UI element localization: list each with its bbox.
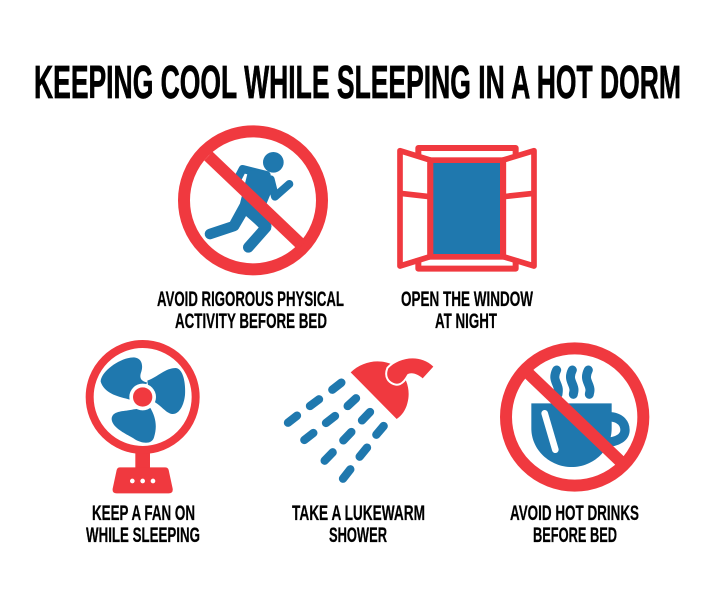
label: shower: [292, 501, 425, 547]
label: hot drinks: [510, 501, 639, 547]
label: open window: AT NIGHT: [435, 309, 497, 333]
label: shower: TAKE A LUKEWARM: [292, 501, 425, 525]
label: shower: SHOWER: [329, 523, 387, 547]
label: hot drinks: AVOID HOT DRINKS: [510, 501, 639, 525]
icon: shower: [288, 358, 433, 479]
label: physical activity: AVOID RIGOROUS PHYSICAL: [157, 287, 344, 311]
icon: open window: [400, 148, 534, 269]
label: physical activity: [157, 287, 344, 333]
icon: no running: [184, 131, 322, 269]
label: hot drinks: BEFORE BED: [533, 523, 617, 547]
label: fan: [86, 501, 200, 547]
label: open window: [401, 287, 533, 333]
icon: fan: [90, 344, 196, 493]
label: fan: KEEP A FAN ON: [92, 501, 195, 525]
label: fan: WHILE SLEEPING: [86, 523, 200, 547]
label: open window: OPEN THE WINDOW: [401, 287, 533, 311]
icon: no hot drinks: [506, 348, 643, 486]
label: physical activity: ACTIVITY BEFORE BED: [175, 309, 327, 333]
